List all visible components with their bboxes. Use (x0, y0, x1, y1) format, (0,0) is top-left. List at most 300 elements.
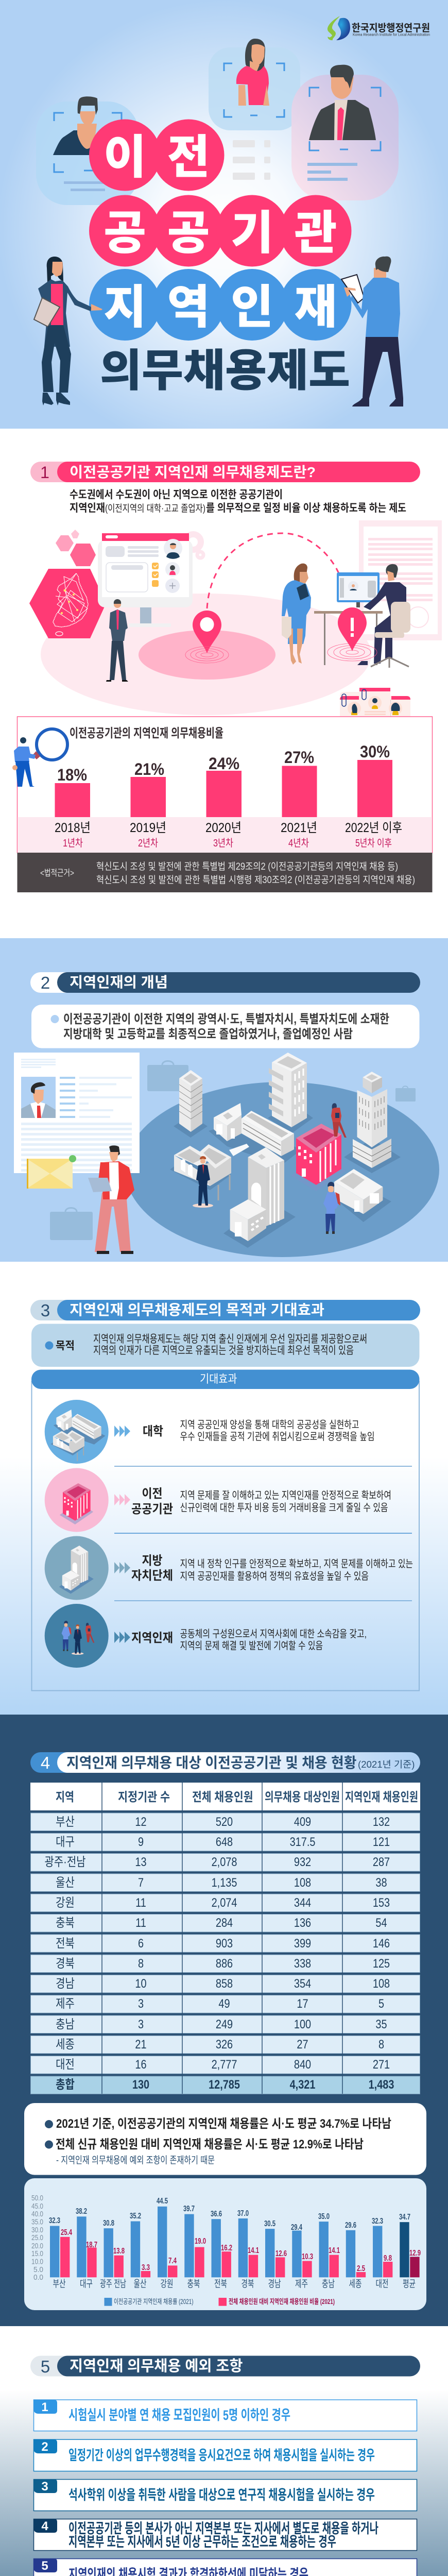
year order labels (63, 837, 392, 849)
column: local talent hired: 54 (375, 1916, 387, 1929)
location pin B (328, 607, 377, 661)
person with magnifier (12, 729, 67, 787)
column: mandatory target: 338 (294, 1956, 311, 1970)
blue values: 39.7 (183, 2205, 195, 2213)
table header cells: 의무채용 대상인원 (265, 1790, 340, 1804)
panel: purpose (31, 1324, 419, 1367)
pink values: 14.1 (248, 2246, 259, 2255)
card text lines (64, 163, 357, 191)
region labels: 세종 (349, 2278, 361, 2290)
exception 5: 5 (41, 2559, 48, 2573)
resume cards (340, 688, 410, 740)
pink values: 16.2 (221, 2244, 232, 2252)
panel: purpose: 목적 (56, 1340, 75, 1352)
building: low house (334, 1169, 391, 1222)
callout: key findings: 2021년 기준, 이전공공기관의 지역인재 채용률은 시·도 평균 34.7%로 나타남 (56, 2117, 391, 2131)
blue values: 30.8 (103, 2219, 114, 2228)
panel: obligatory hiring ratio chart (12, 717, 433, 892)
column: region: 강원 (56, 1895, 75, 1909)
column: mandatory target: 354 (294, 1976, 311, 1990)
year labels: 2020년 (205, 821, 242, 835)
column: region: 부산 (56, 1815, 75, 1828)
exception 3 (33, 2479, 417, 2511)
column: designated institutions: 6 (138, 1936, 144, 1950)
blue values: 36.6 (211, 2210, 222, 2218)
hexagons (29, 530, 106, 638)
title letters: 관 (295, 208, 337, 259)
row: university (45, 1400, 374, 1464)
region labels: 충남 (322, 2278, 335, 2290)
column: local talent hired: 146 (373, 1936, 390, 1950)
column: local talent hired: 8 (378, 2037, 384, 2051)
exception list (33, 2400, 417, 2576)
blue values: 37.0 (237, 2209, 249, 2218)
column: mandatory target: 409 (294, 1815, 311, 1828)
building: centre tower (223, 1147, 296, 1248)
blue circles row 3 (89, 269, 351, 341)
exception 5 (33, 2558, 417, 2576)
region labels: 울산 (134, 2278, 146, 2290)
person: suit man (193, 1156, 213, 1208)
callout: key findings: - 지역인재 의무채용에 예외 조항이 존재하기 때문 (56, 2155, 215, 2166)
column: local talent hired: 35 (375, 2017, 387, 2031)
section 4 heading (30, 1752, 420, 1773)
bar values: 27% (284, 748, 314, 767)
row: local government: 지방 (142, 1554, 163, 1568)
blue values (49, 2197, 410, 2232)
column: region: 대전 (56, 2057, 75, 2071)
concept illustration (14, 1053, 439, 1257)
title letters: 인 (231, 282, 273, 333)
monitor (98, 533, 193, 627)
card: top centre (209, 47, 300, 130)
exception 4: 4 (41, 2519, 48, 2533)
year labels: 2018년 (55, 821, 91, 835)
table header cells (30, 1783, 420, 1810)
blue values: 34.7 (399, 2213, 410, 2222)
pink values: 10.3 (302, 2252, 313, 2261)
pink values: 18.7 (86, 2241, 97, 2249)
section background: hero (0, 0, 448, 429)
blue values: 29.6 (345, 2221, 356, 2230)
title letters: 재 (295, 282, 337, 333)
pink values: 12.6 (275, 2249, 287, 2258)
section background: concept (0, 938, 448, 1262)
column: mandatory target: 317.5 (290, 1835, 315, 1849)
person: man in suit (309, 65, 376, 140)
title letters: 공 (104, 208, 146, 259)
title letters: 지 (104, 282, 146, 333)
row: public institution (45, 1468, 391, 1532)
pink circles row 1 (89, 120, 225, 191)
pink values: 2.5 (357, 2264, 365, 2273)
column: local talent hired: 1,483 (369, 2077, 394, 2091)
plaza tile (229, 1144, 249, 1156)
column: designated institutions (132, 1815, 149, 2091)
section 5 heading: 지역인재 의무채용 예외 조항 (70, 2358, 243, 2375)
row: local talent: 지역의 문제 해결 및 발전에 기여할 수 있음 (180, 1640, 323, 1652)
pink bars (60, 2237, 420, 2277)
column: total hires: 858 (216, 1976, 233, 1990)
section 1 illustration (29, 520, 442, 715)
location pin A (185, 611, 229, 663)
row: university: 우수 인재들을 공적 기관에 취업시킴으로써 경쟁력을 높임 (180, 1431, 375, 1443)
y axis labels: 0.0 (33, 2273, 43, 2282)
callout: key findings: 전체 신규 채용인원 대비 지역인재 채용률은 시·도 평균 12.9%로 나타남 (56, 2138, 364, 2151)
row: university: 지역 공공인재 양성을 통해 대학의 공공성을 실현하고 (180, 1419, 359, 1431)
logo text: 한국지방행정연구원 (352, 22, 430, 34)
column: designated institutions: 13 (135, 1855, 147, 1869)
y axis labels (31, 2194, 43, 2282)
building: pink headquarters (291, 1124, 346, 1191)
section background: purpose (0, 1262, 448, 1715)
y axis labels: 25.0 (31, 2233, 43, 2242)
region labels: 광주 전남 (100, 2278, 126, 2290)
section 3 heading: 3 (41, 1301, 50, 1320)
dividers (114, 1466, 412, 1467)
row: public institution: 공공기관 (131, 1502, 173, 1516)
year labels (55, 821, 402, 835)
row: public institution: 이전 (142, 1487, 163, 1501)
pink values: 25.4 (61, 2228, 72, 2237)
legend: 이전공공기관 지역인재 채용률 (2021) (114, 2298, 194, 2306)
blue values: 32.3 (372, 2217, 383, 2226)
woman in blue dress (282, 564, 311, 665)
column: region (45, 1815, 85, 2091)
resume cards: ★★★★★ (384, 731, 407, 737)
column: total hires: 2,078 (212, 1855, 237, 1869)
card: left (36, 101, 139, 205)
column: total hires: 12,785 (209, 2077, 240, 2091)
logo english: Korea Research Institute for Local Administration (353, 33, 430, 37)
column: region: 경북 (56, 1956, 75, 1970)
year order labels: 4년차 (288, 837, 309, 849)
section 1 heading: 이전공공기관 지역인재 의무채용제도란? (70, 464, 316, 480)
y axis labels: 30.0 (31, 2226, 43, 2234)
gears (185, 534, 203, 558)
section 1 intro text: 를 의무적으로 일정 비율 이상 채용하도록 하는 제도 (206, 502, 406, 514)
section 5 heading (30, 2355, 420, 2376)
chart frame (18, 717, 433, 853)
section 4 heading: 4 (41, 1753, 50, 1772)
legend: 전체 채용인원 대비 지역인재 채용인원 비율 (2021) (229, 2298, 335, 2306)
concept definition box: 이전공공기관이 이전한 지역의 광역시·도, 특별자치시, 특별자치도에 소재한 (63, 1012, 389, 1026)
pink values: 9.8 (384, 2254, 392, 2263)
panel: expected effects: 기대효과 (200, 1372, 237, 1385)
blue bars (50, 2207, 409, 2277)
pink values (61, 2228, 421, 2273)
column: mandatory target: 840 (294, 2057, 311, 2071)
column: local talent hired: 125 (373, 1956, 390, 1970)
legal basis box: 혁신도시 조성 및 발전에 관한 특별법 제29조의2 (이전공공기관등의 지역인재 채용 등) (96, 861, 398, 872)
row: university: 대학 (143, 1425, 163, 1438)
column: region: 광주·전남 (45, 1855, 85, 1869)
section 1 intro text: 수도권에서 수도권이 아닌 지역으로 이전한 공공기관이 (70, 489, 283, 501)
section 1 intro text: (이전지역의 대학·고교 졸업자) (105, 503, 205, 514)
y axis labels: 50.0 (31, 2194, 43, 2202)
column: total hires: 520 (216, 1815, 233, 1828)
column: total hires (209, 1815, 240, 2091)
column: local talent hired: 108 (373, 1976, 390, 1990)
section 5 heading: 5 (41, 2357, 50, 2376)
year order labels: 1년차 (63, 837, 83, 849)
column: region: 충남 (56, 2017, 75, 2031)
y axis labels: 45.0 (31, 2202, 43, 2211)
panel header (31, 1369, 419, 1389)
section background: purpose gradient (0, 1456, 448, 1715)
region labels: 평균 (403, 2278, 416, 2290)
row: local government (45, 1536, 413, 1600)
year labels: 2021년 (281, 821, 317, 835)
table header cells: 지역인재 채용인원 (345, 1790, 418, 1804)
column: designated institutions: 10 (135, 1976, 147, 1990)
table row backgrounds (31, 1813, 420, 2094)
pink values: 19.0 (195, 2237, 206, 2246)
column: mandatory target: 17 (297, 1996, 308, 2010)
list blocks (233, 140, 270, 180)
column: total hires: 284 (216, 1916, 233, 1929)
bar values: 21% (134, 760, 164, 778)
person: woman in red (331, 1103, 347, 1138)
column: total hires: 249 (216, 2017, 233, 2031)
column: designated institutions: 3 (138, 1996, 144, 2010)
callout: key findings (24, 2103, 426, 2175)
table header cells: 지정기관 수 (118, 1790, 170, 1804)
y axis labels: 40.0 (31, 2210, 43, 2218)
column: region: 제주 (56, 1996, 75, 2010)
resume cards: ★★★★★ (343, 731, 366, 737)
concept definition box: 지방대학 및 고등학교를 최종적으로 졸업하였거나, 졸업예정인 사람 (63, 1027, 353, 1041)
title letters: 역 (167, 282, 210, 333)
blue values: 35.2 (130, 2212, 141, 2221)
card: right (291, 75, 399, 200)
section 1 heading (30, 462, 420, 482)
column: designated institutions: 12 (135, 1815, 147, 1828)
building: narrow tower (174, 1070, 208, 1138)
column: mandatory target: 399 (294, 1936, 311, 1950)
section background: status (0, 1715, 448, 2326)
section 1 intro text (70, 489, 406, 514)
column: local talent hired: 38 (375, 1875, 387, 1889)
column: designated institutions: 9 (138, 1835, 144, 1849)
y axis labels: 20.0 (31, 2242, 43, 2250)
exception 4 (33, 2519, 417, 2550)
column: designated institutions: 8 (138, 1956, 144, 1970)
pink circles row 2 (89, 195, 351, 267)
panel: purpose: 지역의 인재가 다른 지역으로 유출되는 것을 방지하는데 최우선 목적이 있음 (93, 1345, 354, 1357)
column: total hires: 886 (216, 1956, 233, 1970)
axis label strip (18, 817, 432, 853)
legend (104, 2298, 335, 2306)
exception 2: 2 (41, 2440, 48, 2454)
panel frame (32, 1381, 419, 1691)
column: total hires: 2,777 (212, 2057, 237, 2071)
resume document (14, 1053, 140, 1173)
exception 1: 1 (41, 2400, 48, 2414)
exception 3: 3 (41, 2480, 48, 2494)
section 2 heading: 2 (41, 973, 50, 992)
chart title: 이전공공기관의 지역인재 의무채용비율 (70, 726, 223, 740)
blue values: 38.2 (76, 2207, 87, 2216)
column: region: 대구 (56, 1835, 75, 1849)
building: balcony tower (268, 1053, 313, 1133)
table header cells: 지역 (56, 1790, 74, 1804)
pink values: 3.3 (142, 2263, 150, 2272)
title letters: 이 (104, 132, 146, 183)
pink values: 7.4 (168, 2257, 177, 2265)
year labels: 2019년 (130, 821, 166, 835)
panel: purpose: 지역인재 의무채용제도는 해당 지역 출신 인재에게 우선 일자리를 제공함으로써 (93, 1333, 367, 1345)
section 3 heading (30, 1300, 420, 1320)
building: right high-rise (344, 1072, 401, 1173)
blue values: 29.4 (291, 2223, 302, 2232)
blue values: 44.5 (157, 2197, 168, 2206)
pink values: 14.1 (329, 2246, 340, 2255)
person: woman in pink (236, 39, 269, 106)
column: local talent hired: 132 (373, 1815, 390, 1828)
region labels: 강원 (161, 2278, 173, 2290)
inner ellipse (139, 630, 275, 680)
hero title: subtitle: 의무채용제도 (100, 346, 350, 396)
region labels: 제주 (295, 2278, 308, 2290)
column: local talent hired: 271 (373, 2057, 390, 2071)
column: mandatory target: 100 (294, 2017, 311, 2031)
person: woman with clipboard (34, 257, 102, 405)
column: designated institutions: 130 (132, 2077, 149, 2091)
row: local talent: 공동체의 구성원으로서 지역사회에 대한 소속감을 갖고, (180, 1628, 367, 1640)
person: man in navy (53, 96, 98, 155)
column: region: 충북 (56, 1916, 75, 1929)
y axis labels: 35.0 (31, 2217, 43, 2227)
section background: exceptions (0, 2390, 448, 2576)
region labels: 대전 (376, 2278, 388, 2290)
panel: expected effects (31, 1369, 419, 1691)
region labels (53, 2278, 416, 2290)
exception 2 (33, 2439, 417, 2471)
exception 1: 시험실시 분야별 연 채용 모집인원이 5명 이하인 경우 (68, 2408, 290, 2423)
column: total hires: 2,074 (212, 1895, 237, 1909)
column: local talent hired (369, 1815, 394, 2091)
section background: white upper (0, 429, 448, 938)
man at computer (357, 564, 410, 668)
man in suit (106, 599, 128, 682)
section 4 heading: (2021년 기준) (358, 1759, 415, 1770)
student with tablet (88, 1145, 134, 1254)
title letters (104, 132, 337, 333)
table header cells: 전체 채용인원 (192, 1790, 253, 1804)
column: designated institutions: 16 (135, 2057, 147, 2071)
column: local talent hired: 153 (373, 1895, 390, 1909)
blue values: 30.5 (264, 2219, 275, 2228)
table: hiring status by region (30, 1783, 420, 2094)
blue values: 32.3 (49, 2216, 60, 2225)
region labels: 전북 (214, 2278, 227, 2290)
region labels: 경남 (268, 2278, 281, 2290)
hero title: circles (89, 120, 351, 341)
computer and desk (314, 572, 383, 665)
column: region: 세종 (56, 2037, 75, 2051)
column: region: 경남 (56, 1976, 75, 1990)
section 4 heading: 지역인재 의무채용 대상 이전공공기관 및 채용 현황 (66, 1755, 356, 1771)
person: man with clipboard (341, 257, 403, 406)
title letters: 기 (231, 208, 273, 259)
logo: top right (328, 16, 430, 40)
column: mandatory target: 932 (294, 1855, 311, 1869)
dashed path arc (207, 533, 339, 608)
legal basis box (18, 853, 433, 892)
logo mark (328, 16, 350, 40)
section 2 heading: 지역인재의 개념 (70, 974, 168, 990)
column: mandatory target: 136 (294, 1916, 311, 1929)
hero illustration: profile cards (36, 39, 399, 205)
column: designated institutions: 11 (135, 1916, 146, 1929)
column: total hires: 648 (216, 1835, 233, 1849)
bar values (57, 742, 390, 784)
section 1 intro text: 지역인재 (70, 502, 105, 514)
bar values: 30% (360, 742, 390, 761)
column: designated institutions: 7 (138, 1875, 144, 1889)
y axis labels: 15.0 (31, 2249, 43, 2258)
row: public institution: 신규인력에 대한 투자 비용 등의 거래비용을 크게 줄일 수 있음 (180, 1502, 388, 1514)
title letters: 공 (167, 208, 210, 259)
y axis labels: 5.0 (33, 2265, 43, 2274)
section 2 heading (30, 972, 420, 993)
column: designated institutions: 11 (135, 1895, 146, 1909)
column: total hires: 326 (216, 2037, 233, 2051)
column: local talent hired: 287 (373, 1855, 390, 1869)
column: total hires: 903 (216, 1936, 233, 1950)
envelope (27, 1155, 76, 1189)
column: region: 울산 (56, 1875, 75, 1889)
column: region: 총합 (56, 2077, 75, 2091)
column: mandatory target: 344 (294, 1895, 311, 1909)
column: mandatory target: 108 (294, 1875, 311, 1889)
year labels: 2022년 이후 (345, 821, 402, 835)
legal basis box: <법적근거> (40, 868, 74, 878)
region labels: 경북 (241, 2278, 254, 2290)
bar values: 18% (57, 766, 87, 784)
y axis labels: 10.0 (31, 2258, 43, 2266)
column: total hires: 1,135 (212, 1875, 237, 1889)
building: university wing (209, 1103, 301, 1165)
row: local government: 지역 공공인재를 활용하여 정책의 유효성을 높일 수 있음 (180, 1570, 369, 1582)
row: local talent: 지역인재 (131, 1631, 173, 1645)
concept definition box (31, 1005, 419, 1048)
year order labels: 3년차 (213, 837, 233, 849)
title letters: 전 (167, 132, 210, 183)
row: public institution: 지역 문제를 잘 이해하고 있는 지역인재를 안정적으로 확보하여 (180, 1489, 391, 1501)
bar values: 24% (209, 754, 239, 773)
column: designated institutions: 3 (138, 2017, 144, 2031)
region labels: 대구 (80, 2278, 93, 2290)
bags (50, 1061, 416, 1240)
exception 1 (33, 2400, 417, 2431)
region labels: 부산 (53, 2278, 66, 2290)
pink values: 13.8 (113, 2247, 125, 2256)
map of korea (53, 573, 88, 636)
brackets (54, 63, 381, 172)
pink values: 12.9 (409, 2249, 421, 2258)
person: hoodie student (323, 1182, 340, 1234)
column: mandatory target: 4,321 (290, 2077, 315, 2091)
column: region: 전북 (56, 1936, 75, 1950)
exception 4: 지역본부 또는 지사에서 5년 이상 근무하는 조건으로 채용하는 경우 (68, 2534, 336, 2550)
row: local talent (45, 1604, 367, 1668)
region labels: 충북 (187, 2278, 200, 2290)
ground ellipse (41, 594, 371, 715)
column: local talent hired: 121 (373, 1835, 390, 1849)
column: total hires: 49 (218, 1996, 230, 2010)
